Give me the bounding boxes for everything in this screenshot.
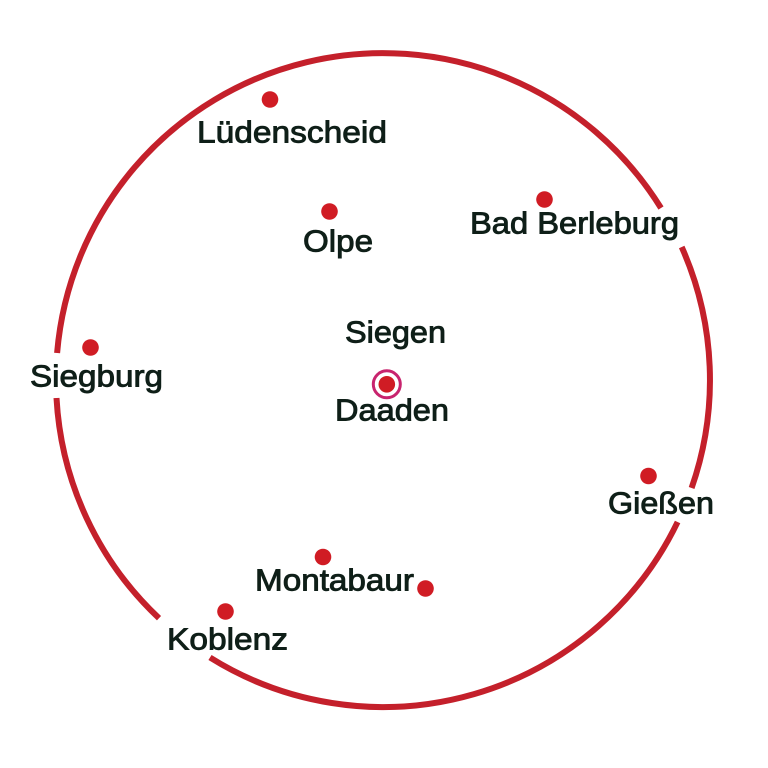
city marker: Montabaur east <box>417 580 434 597</box>
label: Gießen: Gießen <box>608 486 714 520</box>
center marker: Daaden <box>373 371 400 398</box>
city marker: Siegburg <box>82 339 99 356</box>
label: Montabaur: Montabaur <box>255 562 414 598</box>
city marker: Olpe <box>321 203 338 220</box>
city marker: Gießen <box>640 468 657 484</box>
city marker: Lüdenscheid <box>262 91 278 108</box>
label: Olpe: Olpe <box>303 224 373 258</box>
label: Siegen: Siegen <box>345 314 446 350</box>
city marker: Bad Berleburg <box>536 191 553 208</box>
label: Koblenz: Koblenz <box>167 622 288 656</box>
city marker: Montabaur north <box>315 549 331 565</box>
label: Siegburg: Siegburg <box>30 358 163 394</box>
radius circle, broken behind labels <box>56 53 710 707</box>
label: Lüdenscheid: Lüdenscheid <box>197 114 387 150</box>
label: Bad Berleburg: Bad Berleburg <box>470 206 679 240</box>
city marker: Koblenz <box>217 603 234 620</box>
label: Daaden: Daaden <box>335 392 449 428</box>
